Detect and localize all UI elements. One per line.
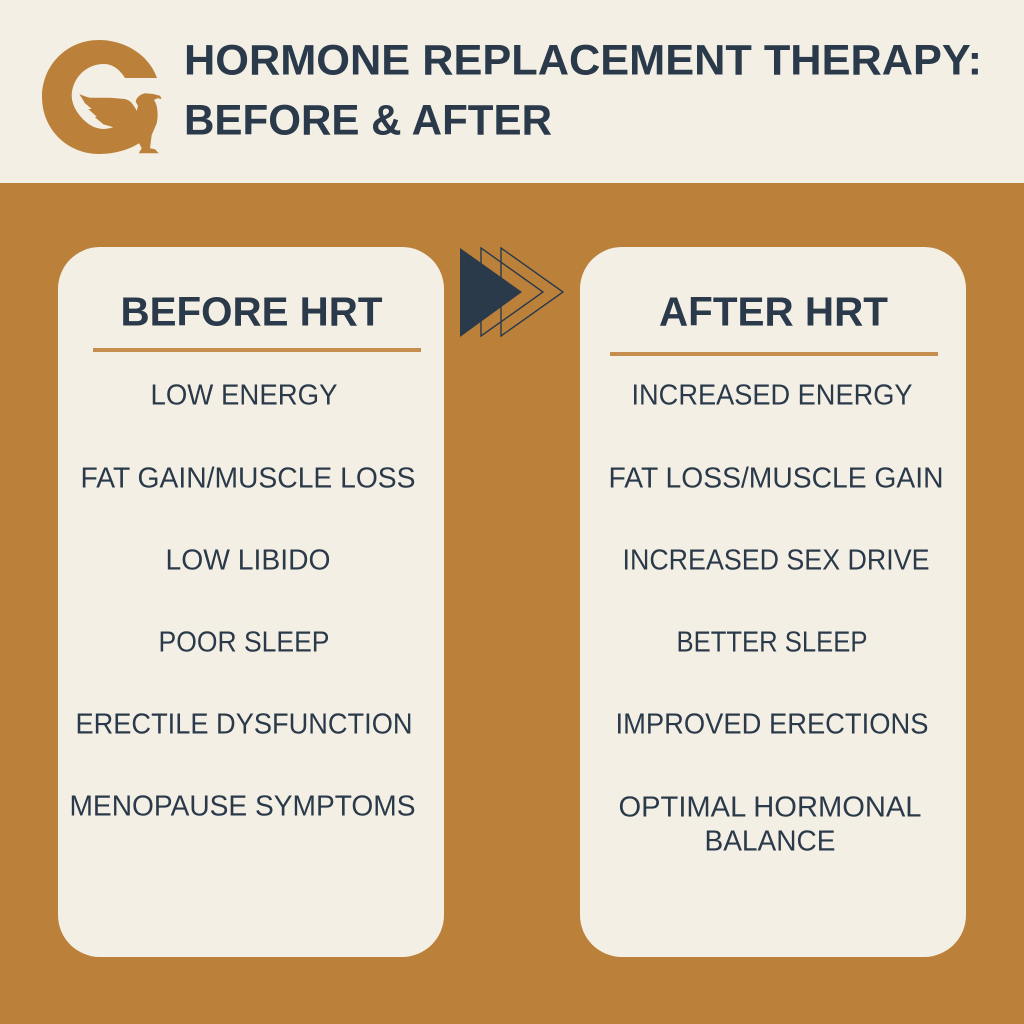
- header band: [0, 0, 1024, 183]
- list: after benefits: [608, 380, 944, 858]
- list: before symptoms: LOW ENERGY: [150, 380, 338, 412]
- list: after benefits: FAT LOSS/MUSCLE GAIN: [608, 462, 944, 494]
- list: after benefits: INCREASED SEX DRIVE: [622, 544, 930, 576]
- list: before symptoms: [70, 380, 416, 822]
- list: before symptoms: LOW LIBIDO: [166, 544, 330, 576]
- title: HORMONE REPLACEMENT THERAPY:: [184, 36, 982, 84]
- list: after benefits: OPTIMAL HORMONAL: [618, 792, 922, 824]
- list: after benefits: INCREASED ENERGY: [632, 380, 912, 412]
- list: after benefits: IMPROVED ERECTIONS: [616, 708, 928, 740]
- title: BEFORE & AFTER: [184, 96, 552, 144]
- title: [184, 36, 982, 144]
- heading: after HRT: AFTER HRT: [659, 288, 888, 334]
- arrow: triple chevron triangles: [460, 248, 563, 337]
- panel: before HRT: [58, 247, 444, 957]
- list: after benefits: BALANCE: [704, 826, 836, 858]
- heading: before HRT: BEFORE HRT: [120, 288, 382, 334]
- list: before symptoms: ERECTILE DYSFUNCTION: [76, 708, 412, 740]
- list: after benefits: BETTER SLEEP: [676, 626, 868, 658]
- panel: after HRT: [580, 247, 966, 957]
- list: before symptoms: POOR SLEEP: [158, 626, 330, 658]
- icon: griffin G logo: [42, 40, 162, 154]
- list: before symptoms: FAT GAIN/MUSCLE LOSS: [80, 462, 416, 494]
- list: before symptoms: MENOPAUSE SYMPTOMS: [70, 790, 416, 822]
